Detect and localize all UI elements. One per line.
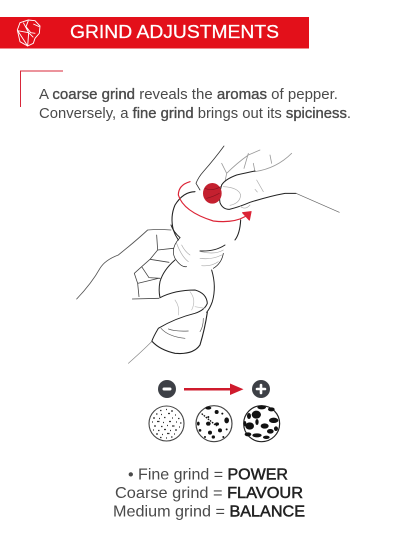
grind summary text (113, 466, 305, 520)
grind summary text: • Fine grind = POWER (128, 466, 288, 484)
lower hand and mill body (77, 225, 225, 363)
intro text: Conversely, a fine grind brings out its spiciness. (39, 105, 351, 122)
grind sample: coarse (244, 405, 280, 442)
heading: GRIND ADJUSTMENTS (70, 22, 279, 42)
intro text (39, 86, 351, 122)
icon: minus (158, 380, 176, 398)
arrow: coarser direction (184, 384, 244, 395)
illustration: hands turning pepper mill knob (77, 146, 339, 363)
icon: lion head logo (17, 20, 40, 46)
pepper mill knob (203, 183, 222, 204)
intro text: A coarse grind reveals the aromas of pepper. (39, 86, 338, 103)
back of hand (77, 229, 171, 299)
mill body (152, 225, 225, 354)
fingers (132, 235, 173, 299)
gripping thumb (128, 290, 207, 363)
grind summary text: Medium grind = BALANCE (113, 504, 305, 520)
thumb (220, 171, 339, 212)
grind summary text: Coarse grind = FLAVOUR (115, 485, 303, 502)
grind sample: medium (196, 406, 232, 442)
red rotation arrow (178, 182, 251, 222)
header banner (0, 17, 309, 48)
mill top sphere (172, 192, 241, 240)
grind sample: fine (149, 406, 184, 441)
collar and base grooves (161, 243, 223, 338)
fingers (196, 146, 292, 190)
icon: plus (252, 380, 270, 398)
upper hand and mill top (172, 146, 339, 240)
grind scale (149, 380, 280, 442)
decorative corner bracket (20, 71, 63, 107)
